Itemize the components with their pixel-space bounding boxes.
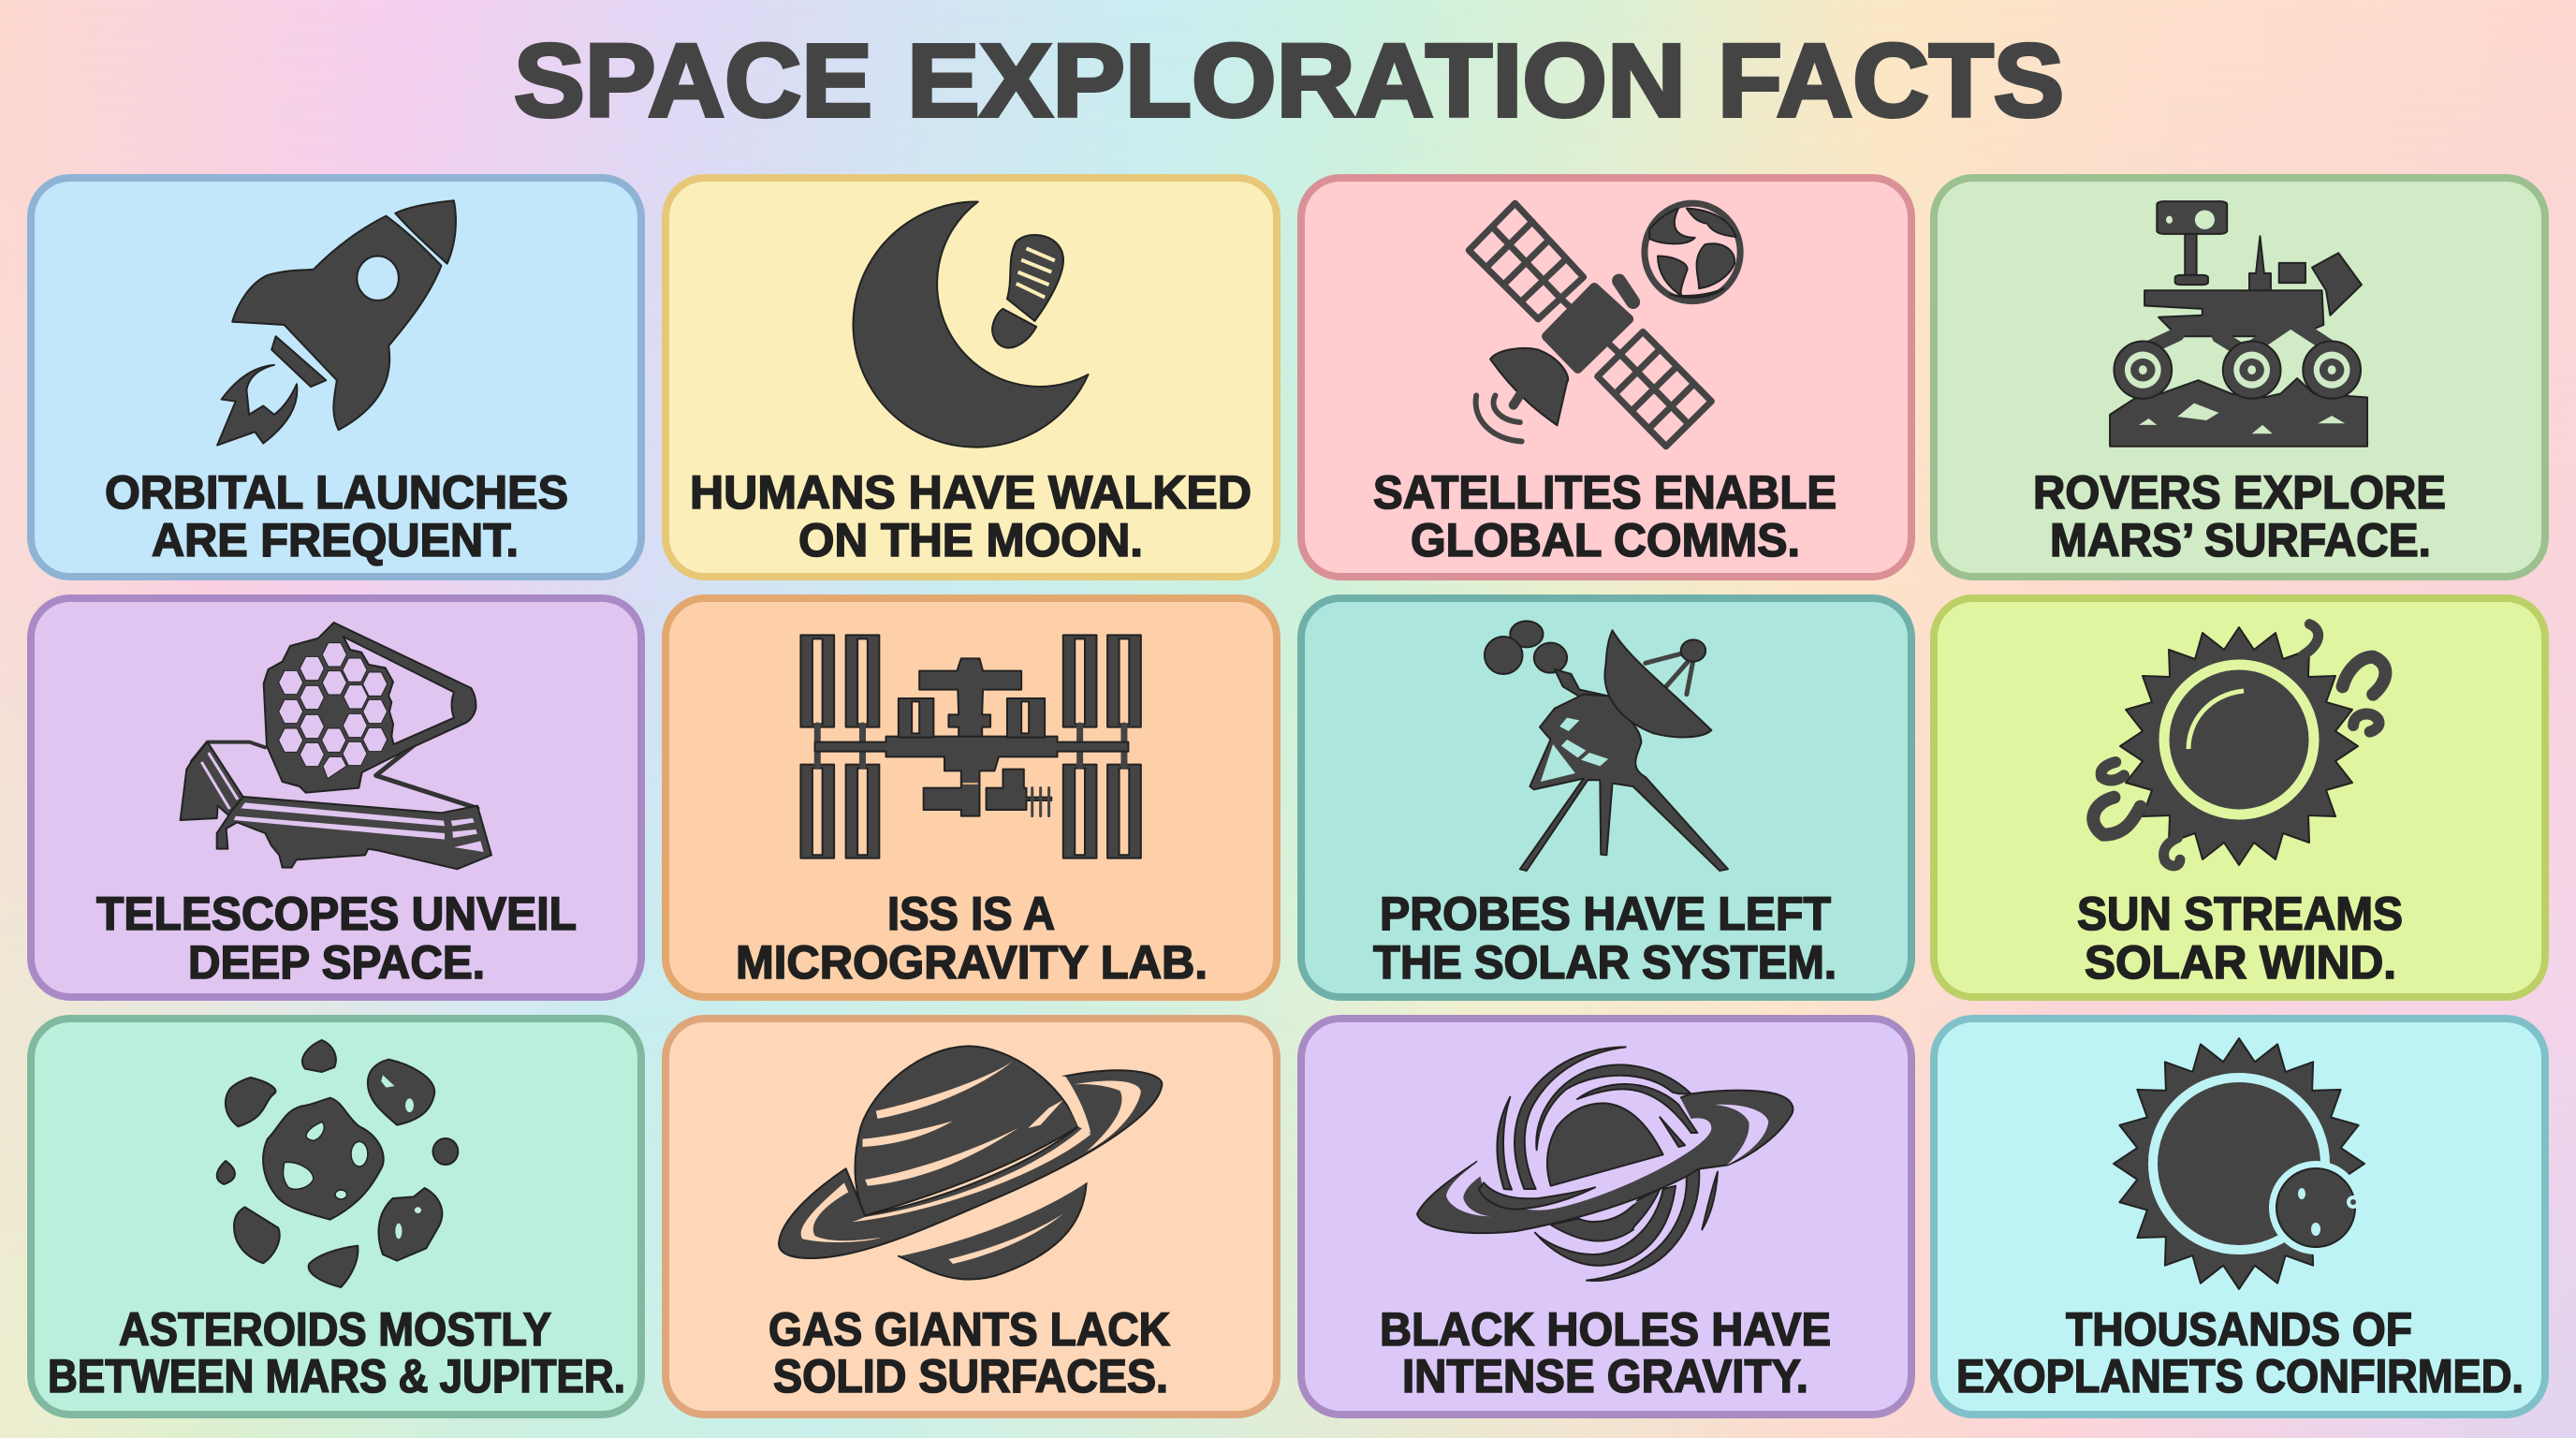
caption: ARE FREQUENT. — [152, 514, 519, 566]
icon: space station — [800, 635, 1141, 858]
icon: satellite and globe — [1469, 203, 1740, 447]
caption: THE SOLAR SYSTEM. — [1373, 936, 1837, 989]
caption — [2033, 466, 2446, 566]
caption: BLACK HOLES HAVE — [1380, 1303, 1831, 1356]
icon: sun with wind — [2093, 624, 2385, 866]
panel: mars rovers — [1934, 178, 2545, 577]
caption: DEEP SPACE. — [188, 936, 485, 989]
caption — [105, 466, 568, 566]
caption: PROBES HAVE LEFT — [1380, 888, 1831, 940]
caption — [2077, 888, 2403, 989]
icon: ringed planet — [779, 1046, 1162, 1280]
caption — [736, 888, 1208, 989]
icon: rocket — [217, 200, 456, 446]
caption: THOUSANDS OF — [2066, 1303, 2412, 1356]
caption — [1373, 466, 1837, 566]
caption — [768, 1303, 1170, 1402]
caption — [1380, 1303, 1831, 1402]
panel: satellites — [1301, 178, 1911, 577]
panel: iss — [666, 598, 1277, 997]
title: SPACE — [514, 23, 872, 139]
icon: space telescope — [181, 623, 491, 869]
caption: ASTEROIDS MOSTLY — [119, 1303, 551, 1356]
panel: solar wind — [1934, 598, 2545, 997]
icon: star with transiting exoplanet — [2114, 1038, 2364, 1289]
icon: moon and bootprint — [853, 202, 1089, 448]
caption: SATELLITES ENABLE — [1373, 466, 1837, 519]
caption: BETWEEN MARS & JUPITER. — [48, 1350, 625, 1402]
caption: MARS’ SURFACE. — [2050, 514, 2431, 566]
caption — [1373, 888, 1837, 989]
icon: space probe — [1485, 621, 1728, 871]
icon: rover — [2110, 201, 2367, 447]
caption: SOLID SURFACES. — [773, 1350, 1168, 1402]
caption: SUN STREAMS — [2077, 888, 2403, 940]
panel: asteroids — [31, 1019, 641, 1415]
caption: INTENSE GRAVITY. — [1402, 1350, 1808, 1402]
caption — [1956, 1303, 2524, 1402]
panel: probes — [1301, 598, 1911, 997]
caption: ROVERS EXPLORE — [2033, 466, 2446, 519]
title: EXPLORATION — [907, 23, 1686, 139]
caption: GLOBAL COMMS. — [1411, 514, 1800, 566]
caption: SOLAR WIND. — [2085, 936, 2396, 989]
title: FACTS — [1718, 23, 2064, 139]
icon: asteroid cluster — [217, 1040, 458, 1287]
panel: orbital launches — [31, 178, 641, 577]
panel: gas giants — [666, 1019, 1277, 1415]
caption: GAS GIANTS LACK — [768, 1303, 1170, 1356]
caption — [690, 466, 1251, 566]
caption: MICROGRAVITY LAB. — [736, 936, 1208, 989]
panel: black holes — [1301, 1019, 1911, 1415]
caption: EXOPLANETS CONFIRMED. — [1956, 1350, 2524, 1402]
caption: ISS IS A — [887, 888, 1055, 940]
caption — [96, 888, 577, 989]
icon: black hole — [1417, 1047, 1793, 1281]
caption: TELESCOPES UNVEIL — [96, 888, 577, 940]
title — [514, 23, 2064, 139]
panel: exoplanets — [1934, 1019, 2545, 1415]
caption: ON THE MOON. — [798, 514, 1143, 566]
caption: HUMANS HAVE WALKED — [690, 466, 1251, 519]
caption — [48, 1303, 625, 1402]
panel: moon walk — [666, 178, 1277, 577]
caption: ORBITAL LAUNCHES — [105, 466, 568, 519]
panel: telescopes — [31, 598, 641, 997]
